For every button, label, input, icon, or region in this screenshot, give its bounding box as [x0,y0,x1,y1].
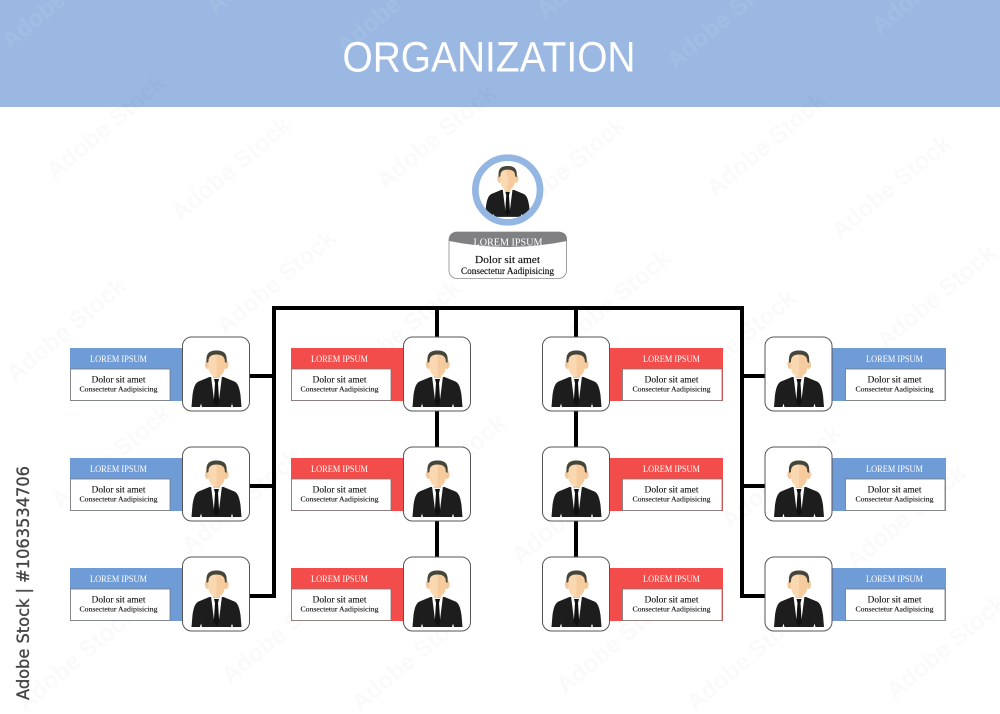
card: left column row 3: Dolor sit amet [92,596,146,606]
card: centre-left column row 1: LOREM IPSUM [311,354,368,364]
card: centre-right column row 1: Consectetur Aadipisicing [632,384,711,394]
header banner [0,0,1000,107]
card: centre-right column row 3: LOREM IPSUM [643,574,700,584]
connector lines [249,306,765,598]
card: right column row 1: LOREM IPSUM [866,354,923,364]
card: centre-left column row 1: Dolor sit amet [312,376,367,386]
card: centre-right column row 1: LOREM IPSUM [643,354,700,364]
card: centre-right column row 1: Dolor sit amet [644,376,699,386]
card: right column row 1: Consectetur Aadipisicing [856,384,934,394]
card: centre-left column row 3: Consectetur Aadipisicing [300,604,379,614]
card: left column row 2 [70,447,250,521]
card: left column row 2: LOREM IPSUM [90,464,147,474]
card: right column row 2: Dolor sit amet [868,486,922,496]
top executive [449,158,567,278]
card: centre-left column row 1: Consectetur Aadipisicing [300,384,379,394]
top executive label card: Dolor sit amet [475,254,540,266]
card: right column row 3 [765,557,946,631]
card: centre-left column row 2 [291,447,470,521]
card: left column row 1: LOREM IPSUM [90,354,147,364]
icon: top executive portrait [485,166,530,217]
card: centre-right column row 2 [542,447,723,521]
card: centre-left column row 3: Dolor sit amet [312,596,367,606]
card: right column row 1 [765,337,946,411]
card: centre-right column row 3 [542,557,723,631]
top executive label card: LOREM IPSUM [474,236,543,248]
card: right column row 3: LOREM IPSUM [866,574,923,584]
card: centre-right column row 1 [542,337,723,411]
card: right column row 3: Consectetur Aadipisicing [856,604,934,614]
card: left column row 3 [70,557,250,631]
card: right column row 1: Dolor sit amet [868,376,922,386]
card: right column row 2: Consectetur Aadipisicing [856,494,934,504]
card: right column row 2 [765,447,946,521]
icon: top executive avatar ring [475,158,540,222]
card: right column row 2: LOREM IPSUM [866,464,923,474]
card: left column row 1 [70,337,250,411]
card: right column row 3: Dolor sit amet [868,596,922,606]
card: left column row 2: Consectetur Aadipisicing [80,494,158,504]
card: left column row 1: Dolor sit amet [92,376,146,386]
card: centre-left column row 3: LOREM IPSUM [311,574,368,584]
card: centre-right column row 2: Consectetur Aadipisicing [632,494,711,504]
card: centre-right column row 3: Consectetur Aadipisicing [632,604,711,614]
stock credit vertical text: Adobe Stock | #1063534706 [14,466,34,700]
title: ORGANIZATION [342,34,636,82]
card: centre-left column row 2: Dolor sit amet [312,486,367,496]
top executive label card [449,232,567,278]
card: centre-right column row 3: Dolor sit amet [644,596,699,606]
card: left column row 3: LOREM IPSUM [90,574,147,584]
card: left column row 3: Consectetur Aadipisicing [80,604,158,614]
card: centre-left column row 1 [291,337,470,411]
card: centre-right column row 2: Dolor sit amet [644,486,699,496]
top executive label card: Consectetur Aadipisicing [461,266,555,276]
card: centre-left column row 2: Consectetur Aadipisicing [300,494,379,504]
card: left column row 1: Consectetur Aadipisicing [80,384,158,394]
card: centre-right column row 2: LOREM IPSUM [643,464,700,474]
card: centre-left column row 3 [291,557,470,631]
card: centre-left column row 2: LOREM IPSUM [311,464,368,474]
card: left column row 2: Dolor sit amet [92,486,146,496]
